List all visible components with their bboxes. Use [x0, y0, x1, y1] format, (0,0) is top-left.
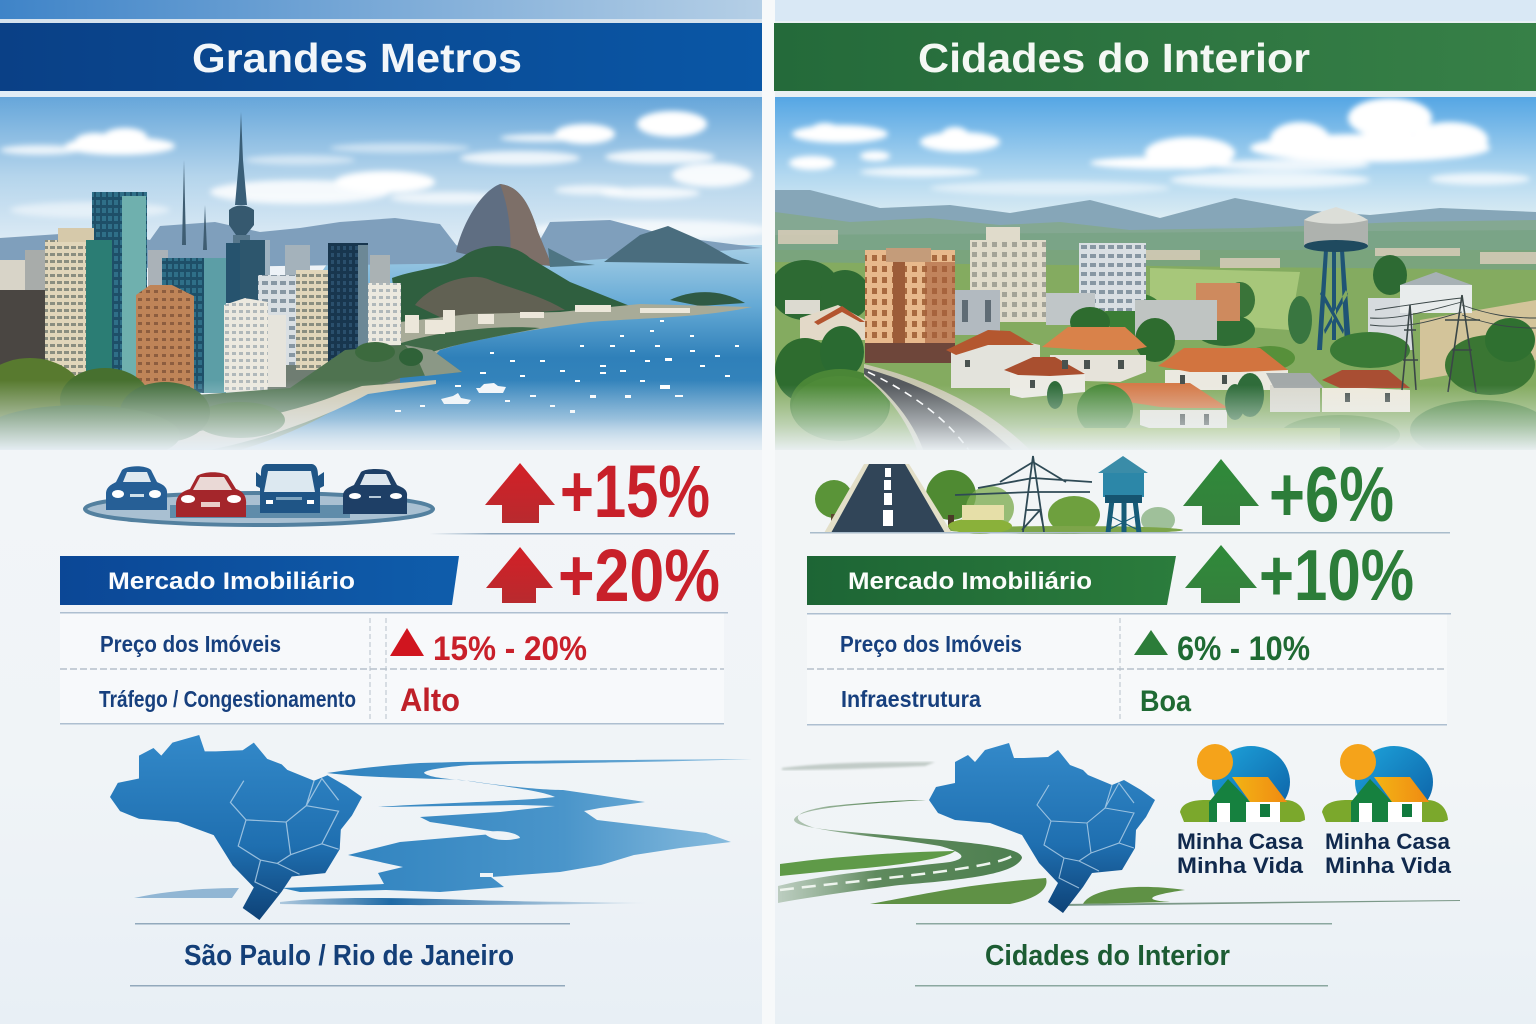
icon: road, trees, pylon and water tower — [810, 456, 1450, 534]
green hill — [392, 246, 628, 322]
icon: bus — [256, 464, 324, 513]
banner: Mercado Imobiliário — [60, 556, 459, 605]
logo: Minha Casa Minha Vida: Minha Casa — [1325, 829, 1451, 854]
foreground trees — [878, 373, 1536, 442]
row: Infraestrutura: Infraestrutura — [841, 686, 981, 712]
heading: Cidades do Interior — [774, 23, 1536, 91]
icon: green winding road — [778, 762, 1022, 903]
land and promenade — [177, 342, 462, 447]
stat: infrastructure +6% — [1183, 450, 1394, 538]
icon: road — [824, 464, 952, 533]
table: Grandes Metros — [60, 612, 728, 724]
icon: traffic cars — [85, 464, 433, 525]
decorative blue river map shapes — [134, 759, 752, 905]
logo: Minha Casa Minha Vida — [1177, 744, 1305, 878]
banner: Mercado Imobiliário — [807, 556, 1176, 605]
skyscrapers — [0, 192, 401, 400]
mid trees — [775, 307, 1535, 441]
row: Infraestrutura: Boa — [1140, 685, 1191, 718]
stat: infrastructure +6%: +6% — [1269, 450, 1394, 538]
pylons and power lines — [1370, 295, 1536, 392]
back trees — [770, 255, 1407, 346]
row: Preço dos Imóveis — [100, 628, 587, 668]
decorative green grass and ground — [870, 878, 1460, 906]
row: Infraestrutura — [841, 685, 1191, 718]
heading: Grandes Metros: Grandes Metros — [192, 35, 522, 81]
fade — [0, 380, 762, 451]
mountains — [775, 190, 1536, 230]
row: Tráfego / Congestionamento: Tráfego / Congestionamento — [99, 686, 356, 712]
icon: water tower — [1098, 456, 1148, 533]
houses — [946, 327, 1410, 430]
logo: Minha Casa Minha Vida — [1322, 744, 1452, 878]
footer: Cidades do Interior: Cidades do Interior — [985, 940, 1230, 972]
banner: Mercado Imobiliário: Mercado Imobiliário — [848, 568, 1092, 595]
row: Preço dos Imóveis — [840, 630, 1310, 668]
stat: traffic +15%: +15% — [560, 450, 710, 533]
icon: pylon — [955, 456, 1092, 532]
stat: real estate +20%: +20% — [558, 534, 720, 617]
panel: Grandes Metros — [0, 0, 770, 1024]
row: Preço dos Imóveis: Preço dos Imóveis — [100, 631, 281, 657]
panel: Cidades do Interior — [770, 0, 1536, 1024]
bay water — [256, 245, 762, 446]
illustration: interior town — [770, 97, 1536, 460]
icon: navy car — [343, 469, 407, 514]
road — [864, 364, 1024, 445]
stat: real estate +10% — [1185, 536, 1414, 616]
banner: Mercado Imobiliário: Mercado Imobiliário — [108, 568, 355, 595]
row: Preço dos Imóveis: 6% - 10% — [1177, 630, 1310, 668]
Sugarloaf — [456, 184, 552, 266]
logo: Minha Casa Minha Vida: Minha Vida — [1325, 853, 1452, 878]
footer: São Paulo / Rio de Janeiro: São Paulo / Rio de Janeiro — [184, 940, 514, 972]
heading: Cidades do Interior: Cidades do Interior — [918, 35, 1310, 81]
heading: Grandes Metros — [0, 23, 762, 91]
water tower — [1304, 207, 1368, 350]
logo: Minha Casa Minha Vida: Minha Casa — [1177, 829, 1304, 854]
row: Tráfego / Congestionamento — [99, 682, 460, 718]
logo: Minha Casa Minha Vida: Minha Vida — [1177, 853, 1304, 878]
map: Brazil — [110, 735, 362, 920]
row: Preço dos Imóveis: 15% - 20% — [433, 630, 587, 668]
shoreline — [401, 304, 752, 354]
illustration: Rio de Janeiro skyline and bay — [0, 97, 770, 465]
icon: red car — [176, 472, 246, 517]
boats — [395, 320, 739, 413]
stat: traffic +15% — [430, 450, 735, 534]
row: Preço dos Imóveis: Preço dos Imóveis — [840, 631, 1022, 657]
icon: trees — [815, 470, 1183, 534]
distant city — [0, 240, 400, 390]
table: Cidades do Interior — [807, 613, 1451, 726]
icon: blue car — [106, 466, 167, 510]
fade — [775, 385, 1536, 451]
stat: real estate +10%: +10% — [1259, 536, 1414, 616]
antennas and tower — [182, 113, 254, 250]
row: Tráfego / Congestionamento: Alto — [400, 682, 460, 718]
foreground trees — [0, 358, 209, 448]
stat: real estate +20% — [486, 534, 720, 617]
map: Brazil — [929, 743, 1155, 913]
buildings — [785, 227, 1472, 363]
